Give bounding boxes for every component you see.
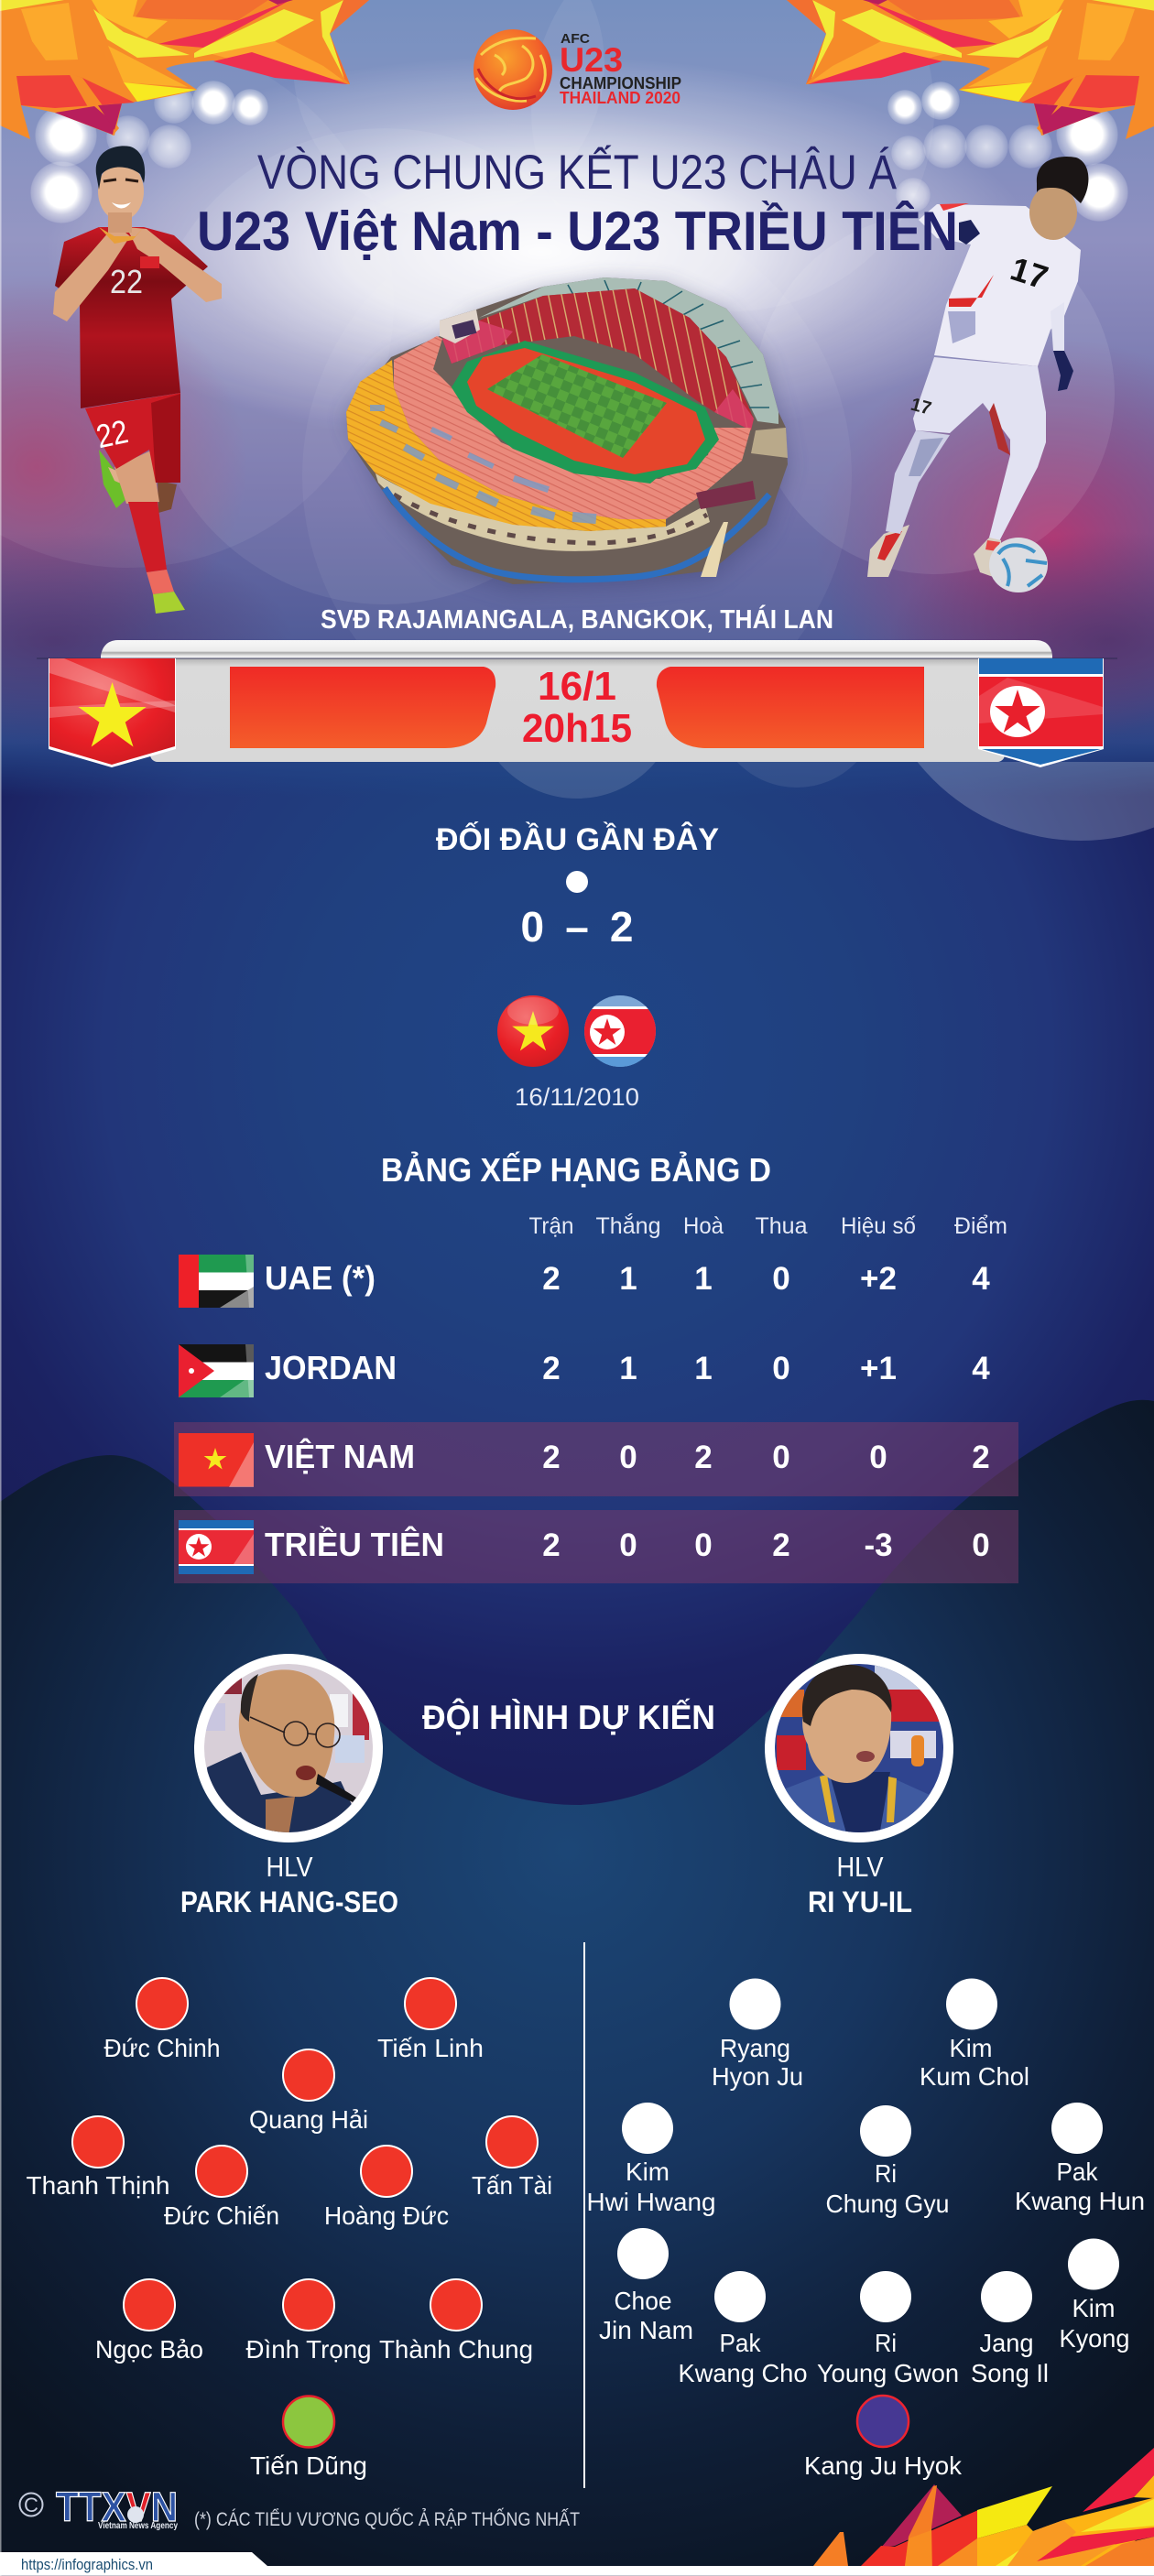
row: Vietnam: 0 <box>619 1440 637 1475</box>
player: Pak Kwang Hun: Pak <box>1057 2158 1098 2186</box>
row: Jordan: 1 <box>694 1351 713 1386</box>
row: Jordan: 0 <box>772 1351 790 1386</box>
row: North Korea: 2 <box>542 1527 561 1563</box>
row: North Korea: 2 <box>772 1527 790 1563</box>
coach name: North Korea: RI YU-IL <box>808 1886 912 1918</box>
round flag: Vietnam <box>497 995 569 1067</box>
head <box>1029 185 1077 240</box>
row: UAE: 0 <box>772 1261 790 1297</box>
coach name: Vietnam: HLV <box>266 1851 313 1883</box>
row: Vietnam: 2 <box>694 1440 713 1475</box>
heading: BẢNG XẾP HẠNG BẢNG D <box>381 1151 771 1189</box>
sleeve <box>1051 302 1064 351</box>
copyright symbol <box>20 2493 42 2516</box>
row: Vietnam: 0 <box>869 1440 887 1475</box>
sock <box>128 502 167 572</box>
player: Pak Kwang Hun <box>1015 2103 1145 2215</box>
coach photo: Ri Yu-il <box>765 1654 953 1842</box>
player: Vietnam number 22 <box>53 146 222 614</box>
logo: AFC U23 Championship: THAILAND 2020 <box>560 89 680 107</box>
gloves <box>959 220 980 245</box>
blue lower band <box>385 488 769 580</box>
player: Kim Kum Chol: Kim <box>949 2034 993 2062</box>
pink stands <box>394 336 751 519</box>
row: UAE: 1 <box>694 1261 713 1297</box>
row: Vietnam: VIỆT NAM <box>265 1437 415 1475</box>
row: North Korea: -3 <box>864 1527 893 1563</box>
arms <box>53 224 130 321</box>
decoration: top right star <box>787 0 1154 139</box>
player: Pak Kwang Cho: Kwang Cho <box>678 2359 808 2387</box>
player: Pak Kwang Cho <box>678 2271 808 2387</box>
player: Ryang Hyon Ju: Ryang <box>720 2034 790 2062</box>
player: Pak Kwang Cho: Pak <box>720 2329 761 2357</box>
row: UAE: UAE (*) <box>265 1259 376 1297</box>
row: North Korea: 0 <box>694 1527 713 1563</box>
flag ribbon: North Korea <box>978 658 1104 767</box>
row: North Korea: 0 <box>972 1527 990 1563</box>
player: Đức Chinh <box>104 1978 220 2062</box>
player: Đức Chiến <box>164 2146 279 2230</box>
row: Vietnam <box>174 1422 1018 1496</box>
green ring <box>452 341 719 484</box>
title line 2: U23 Việt Nam - U23 TRIỀU TIÊN <box>197 201 958 262</box>
player: Choe Jin Nam <box>599 2228 693 2344</box>
player: Tấn Tài <box>472 2116 552 2200</box>
score: 0 – 2 <box>520 903 634 951</box>
player: Kim Kum Chol <box>920 1978 1029 2091</box>
player: Kim Kyong <box>1059 2238 1130 2353</box>
player: Quang Hải <box>249 2049 368 2134</box>
bullet <box>566 871 588 893</box>
player: Kim Kyong: Kim <box>1072 2294 1116 2322</box>
flag ribbon: Vietnam <box>49 658 176 767</box>
stadium <box>346 277 788 591</box>
player: Ri Young Gwon <box>817 2271 959 2387</box>
player: Hoàng Đức: Hoàng Đức <box>324 2201 449 2230</box>
blue lettering <box>370 405 596 524</box>
ball and boot <box>974 538 1048 592</box>
stage lights <box>30 81 1128 223</box>
table header <box>529 1212 1007 1239</box>
venue caption: SVĐ RAJAMANGALA, BANGKOK, THÁI LAN <box>321 603 833 635</box>
player: Kim Hwi Hwang: Kim <box>626 2158 670 2186</box>
banner panel <box>150 658 1005 762</box>
heading: ĐỐI ĐẦU GẦN ĐÂY <box>436 821 719 857</box>
pitch <box>487 354 667 458</box>
row: UAE: 1 <box>619 1261 637 1297</box>
row: Vietnam: 2 <box>542 1440 561 1475</box>
player: Hoàng Đức <box>324 2146 449 2230</box>
shirt flag badge <box>140 256 159 268</box>
lineup: North Korea <box>586 1978 1145 2480</box>
shirt <box>55 227 208 408</box>
front shoe <box>153 592 185 614</box>
coach name: Vietnam: PARK HANG-SEO <box>180 1886 398 1918</box>
row: UAE <box>179 1255 990 1308</box>
round flag: North Korea <box>584 995 656 1067</box>
row: Jordan: 4 <box>972 1351 990 1386</box>
stadium base <box>346 277 788 584</box>
player: Thành Chung <box>379 2279 533 2364</box>
row: UAE: 4 <box>972 1261 990 1297</box>
left leg <box>886 430 950 534</box>
player: Đức Chinh: Đức Chinh <box>104 2034 220 2062</box>
row: North Korea: 0 <box>619 1527 637 1563</box>
row: North Korea: TRIỀU TIÊN <box>265 1525 444 1563</box>
logo: AFC U23 Championship: U23 <box>560 41 623 79</box>
row: UAE: +2 <box>860 1261 897 1297</box>
floodlight tower <box>701 522 728 577</box>
match time: 20h15 <box>522 706 632 751</box>
red panel right <box>657 667 924 748</box>
source url: https://infographics.vn <box>21 2556 153 2573</box>
player: Ngọc Bảo: Ngọc Bảo <box>95 2335 203 2364</box>
roof <box>479 277 778 424</box>
yellow stands <box>346 360 666 531</box>
player: Ryang Hyon Ju: Hyon Ju <box>712 2062 803 2091</box>
player: Thanh Thịnh <box>26 2116 170 2200</box>
player: Kim Kum Chol: Kum Chol <box>920 2062 1029 2091</box>
shorts and right leg <box>913 357 1046 543</box>
table header: Thua <box>755 1213 808 1239</box>
row: Jordan: 1 <box>619 1351 637 1386</box>
number 22 shorts: 22 <box>93 412 131 455</box>
player: Jang Song Il: Song Il <box>971 2359 1049 2387</box>
player: Ri Young Gwon: Ri <box>875 2329 897 2357</box>
match date: 16/1 <box>538 664 616 709</box>
player: Kim Kyong: Kyong <box>1059 2324 1130 2353</box>
row: Jordan <box>179 1344 990 1397</box>
player: Ngọc Bảo <box>95 2279 203 2364</box>
row: Vietnam: 2 <box>972 1440 990 1475</box>
player: Thanh Thịnh: Thanh Thịnh <box>26 2171 170 2200</box>
player: Tiến Linh <box>377 1978 484 2062</box>
coach name: Vietnam <box>180 1851 398 1918</box>
player: Ri Young Gwon: Young Gwon <box>817 2359 959 2387</box>
player: Kim Hwi Hwang: Hwi Hwang <box>586 2188 716 2216</box>
table header: Trận <box>529 1213 573 1239</box>
logo: AFC U23 Championship <box>474 29 681 110</box>
player: Kang Ju Hyok: Kang Ju Hyok <box>804 2451 963 2480</box>
red stands <box>442 288 754 430</box>
match banner <box>37 640 1117 762</box>
coach photo: Park Hang-seo <box>194 1654 383 1842</box>
decoration: top left star <box>0 0 369 139</box>
date: 16/11/2010 <box>515 1083 639 1111</box>
logo: AFC U23 Championship: AFC <box>561 31 590 47</box>
title <box>197 145 958 262</box>
section heading: predicted lineups: ĐỘI HÌNH DỰ KIẾN <box>422 1698 715 1736</box>
red panel left <box>230 667 495 748</box>
row: UAE: 2 <box>542 1261 561 1297</box>
shorts number: 17 <box>909 395 933 419</box>
row: Vietnam: 0 <box>772 1440 790 1475</box>
table header: Hiệu số <box>841 1213 916 1239</box>
row: Jordan: 2 <box>542 1351 561 1386</box>
player: Ryang Hyon Ju <box>712 1978 803 2091</box>
player: Đình Trọng: Đình Trọng <box>245 2335 372 2364</box>
row: Jordan: JORDAN <box>265 1349 397 1386</box>
table header: Hoà <box>683 1213 724 1239</box>
shirt <box>919 204 1081 366</box>
section: head to head <box>436 821 719 1111</box>
scoreboard <box>440 310 480 343</box>
player: Đình Trọng <box>245 2279 372 2364</box>
section: group D standings <box>174 1151 1018 1583</box>
player: Kim Hwi Hwang <box>586 2103 716 2216</box>
shorts <box>85 393 180 483</box>
player: Ri Chung Gyu: Ri <box>875 2159 897 2188</box>
row: North Korea <box>174 1510 1018 1583</box>
number 17: 17 <box>1006 249 1052 297</box>
running track <box>467 348 705 474</box>
player: Jang Song Il <box>971 2271 1049 2387</box>
title line 1: VÒNG CHUNG KẾT U23 CHÂU Á <box>257 145 898 200</box>
player: Ri Chung Gyu <box>826 2105 949 2218</box>
banner top bar <box>101 640 1052 658</box>
player: Tiến Linh: Tiến Linh <box>377 2034 484 2062</box>
table header: Điểm <box>954 1213 1007 1239</box>
player: Thành Chung: Thành Chung <box>379 2335 533 2364</box>
player: North Korea number 17 <box>867 157 1088 592</box>
back shoe <box>99 450 125 508</box>
decoration: bottom right flames <box>813 2448 1154 2566</box>
player: Pak Kwang Hun: Kwang Hun <box>1015 2187 1145 2215</box>
thigh <box>114 451 159 504</box>
logo: AFC U23 Championship: CHAMPIONSHIP <box>560 74 681 92</box>
lineup: Vietnam <box>26 1978 552 2480</box>
player: Jang Song Il: Jang <box>980 2329 1033 2357</box>
player: Ri Chung Gyu: Chung Gyu <box>826 2190 949 2218</box>
head <box>98 162 144 221</box>
copyright symbol: C <box>24 2494 38 2516</box>
logo ball <box>474 29 552 110</box>
coach name: North Korea <box>808 1851 912 1918</box>
player: Choe Jin Nam: Choe <box>614 2287 672 2315</box>
coach name: North Korea: HLV <box>837 1851 884 1883</box>
table header: Thắng <box>595 1212 661 1239</box>
logo: TTXVN: TTXVN <box>56 2484 178 2530</box>
player: Choe Jin Nam: Jin Nam <box>599 2316 693 2344</box>
player: Tiến Dũng <box>250 2396 367 2480</box>
player: Tiến Dũng: Tiến Dũng <box>250 2451 367 2480</box>
left shoe <box>867 525 909 577</box>
player: Tấn Tài: Tấn Tài <box>472 2171 552 2200</box>
row: Jordan: +1 <box>860 1351 897 1386</box>
logo: TTXVN: Vietnam News Agency <box>98 2521 178 2531</box>
player: Kang Ju Hyok <box>804 2396 963 2480</box>
footnote: (*) CÁC TIỂU VƯƠNG QUỐC Ả RẬP THỐNG NHẤT <box>194 2508 580 2530</box>
facade columns <box>376 473 710 551</box>
player: Quang Hải: Quang Hải <box>249 2105 368 2134</box>
number 22 shirt: 22 <box>110 263 143 300</box>
player: Đức Chiến: Đức Chiến <box>164 2201 279 2230</box>
